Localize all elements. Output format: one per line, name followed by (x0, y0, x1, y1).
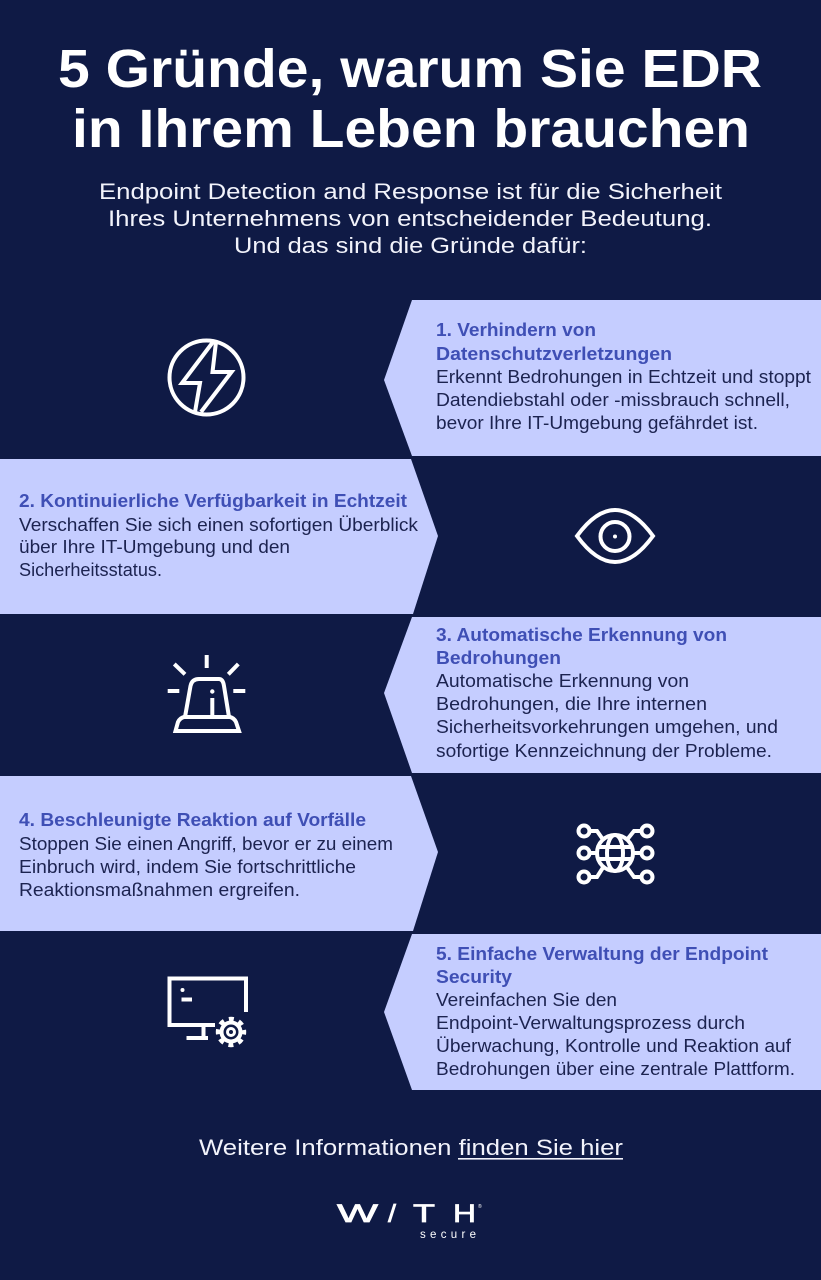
icon: monitor with gear (170, 978, 246, 1045)
panel: reason 3: Bedrohungen, die Ihre internen (436, 694, 707, 714)
title (58, 39, 762, 159)
panel: reason 4: Stoppen Sie einen Angriff, bevor er zu einem (19, 834, 393, 854)
panel: reason 1 (384, 300, 821, 456)
logo: WithSecure (337, 1200, 482, 1241)
panel: reason 2: Verschaffen Sie sich einen sofortigen Überblick (19, 515, 419, 535)
panel: reason 3: sofortige Kennzeichnung der Probleme. (436, 741, 772, 761)
intro text: Endpoint Detection and Response ist für die Sicherheit (99, 179, 722, 204)
logo: WithSecure: ® (478, 1203, 482, 1210)
panel: reason 4 (0, 776, 438, 931)
intro text (99, 179, 722, 258)
call to action: Weitere Informationen finden Sie hier (199, 1135, 623, 1160)
panel: reason 4: Reaktionsmaßnahmen ergreifen. (19, 880, 300, 900)
panel: reason 1: 1. Verhindern von (436, 320, 596, 340)
icon: eye (577, 510, 653, 562)
panel: reason 3: Automatische Erkennung von (436, 671, 689, 691)
panel: reason 1: bevor Ihre IT-Umgebung gefährdet ist. (436, 413, 758, 433)
panel: reason 1: Erkennt Bedrohungen in Echtzeit und stoppt (436, 367, 811, 387)
icon: lightning bolt (170, 340, 244, 414)
panel: reason 5: Bedrohungen über eine zentrale Plattform. (436, 1059, 795, 1079)
panel: reason 3 (384, 617, 821, 773)
intro text: Und das sind die Gründe dafür: (234, 233, 587, 258)
panel: reason 3: Sicherheitsvorkehrungen umgehen, und (436, 717, 778, 737)
panel: reason 5: 5. Einfache Verwaltung der Endpoint (436, 944, 768, 964)
title: in Ihrem Leben brauchen (72, 99, 750, 159)
title: 5 Gründe, warum Sie EDR (58, 39, 762, 99)
panel: reason 2 (0, 459, 438, 614)
panel: reason 3: Bedrohungen (436, 648, 561, 668)
logo: WithSecure: T (413, 1200, 435, 1228)
panel: reason 5 (384, 934, 821, 1090)
panel: reason 5: Vereinfachen Sie den (436, 990, 617, 1010)
panel: reason 5: Überwachung, Kontrolle und Reaktion auf (436, 1036, 792, 1056)
panel: reason 5: Security (436, 967, 512, 987)
panel: reason 2: über Ihre IT-Umgebung und den (19, 537, 290, 557)
panel: reason 1: Datenschutzverletzungen (436, 344, 672, 364)
panel: reason 4: 4. Beschleunigte Reaktion auf Vorfälle (19, 810, 366, 830)
icon: alarm light (168, 655, 245, 731)
logo: WithSecure: secure (420, 1229, 476, 1241)
panel: reason 5: Endpoint-Verwaltungsprozess durch (436, 1013, 745, 1033)
logo: WithSecure: W (337, 1200, 379, 1228)
panel: reason 3: 3. Automatische Erkennung von (436, 625, 727, 645)
logo: WithSecure: / (388, 1200, 396, 1228)
panel: reason 4: Einbruch wird, indem Sie fortschrittliche (19, 857, 356, 877)
icon: network globe (578, 826, 652, 882)
panel: reason 2: Sicherheitsstatus. (19, 560, 162, 580)
panel: reason 1: Datendiebstahl oder -missbrauch schnell, (436, 390, 790, 410)
logo: WithSecure: H (453, 1200, 476, 1228)
intro text: Ihres Unternehmens von entscheidender Bedeutung. (108, 206, 712, 231)
panel: reason 2: 2. Kontinuierliche Verfügbarkeit in Echtzeit (19, 491, 407, 511)
